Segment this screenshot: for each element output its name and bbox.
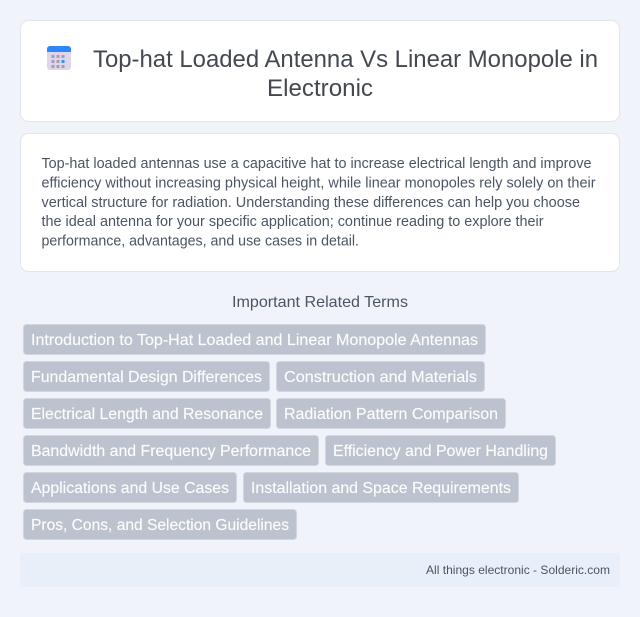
tag xyxy=(276,398,506,428)
tag: Applications and Use Cases xyxy=(31,480,229,497)
text block: description: efficiency without increasing physical height, while linear monopoles rely solely on their xyxy=(42,175,596,191)
tag xyxy=(24,324,486,354)
text block: description: performance, advantages, and use cases in detail. xyxy=(42,234,359,250)
tag xyxy=(24,436,318,466)
tag: Bandwidth and Frequency Performance xyxy=(31,443,311,460)
tag list xyxy=(24,324,556,540)
tag xyxy=(24,510,296,540)
title: Electronic xyxy=(267,75,373,102)
tag xyxy=(24,362,270,392)
tag xyxy=(326,436,556,466)
tag xyxy=(276,362,484,392)
title: Top-hat Loaded Antenna Vs Linear Monopole in xyxy=(93,46,598,73)
heading: important related terms: Important Related Terms xyxy=(232,294,408,311)
panel: description xyxy=(20,134,620,272)
footer xyxy=(20,553,620,587)
tag: Installation and Space Requirements xyxy=(251,480,511,497)
text block: description: the ideal antenna for your specific application; continue reading to explore their xyxy=(42,214,544,230)
title xyxy=(93,46,598,102)
text block: description: Top-hat loaded antennas use a capacitive hat to increase electrical length and improve xyxy=(42,156,592,172)
tag xyxy=(24,472,236,502)
tag: Construction and Materials xyxy=(284,369,477,386)
text block: description: vertical structure for radiation. Understanding these differences can help you choose xyxy=(42,195,580,211)
icon: calendar xyxy=(47,46,71,70)
text block: description xyxy=(42,156,596,250)
tag xyxy=(244,472,518,502)
footer: All things electronic - Solderic.com xyxy=(426,563,610,577)
tag xyxy=(24,398,270,428)
tag: Electrical Length and Resonance xyxy=(31,406,263,423)
tag: Fundamental Design Differences xyxy=(31,369,262,386)
tag: Efficiency and Power Handling xyxy=(333,443,548,460)
tag: Radiation Pattern Comparison xyxy=(284,406,498,423)
tag: Pros, Cons, and Selection Guidelines xyxy=(31,517,289,534)
panel: header xyxy=(20,20,620,122)
tag: Introduction to Top-Hat Loaded and Linear Monopole Antennas xyxy=(31,332,478,349)
